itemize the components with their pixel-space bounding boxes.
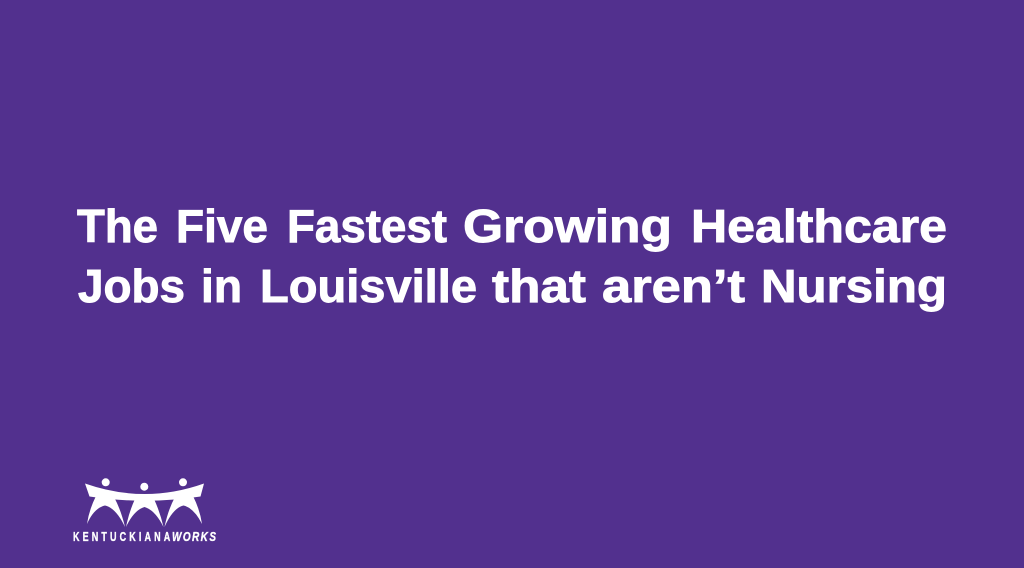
icon: three figures joined by a band <box>85 478 204 527</box>
title: Louisville <box>260 260 477 312</box>
title: Five <box>176 200 268 252</box>
logo wordmark: KENTUCKIANA <box>73 531 170 544</box>
title: Jobs <box>78 260 185 312</box>
title: Growing <box>463 200 672 252</box>
title: aren’t <box>602 260 745 312</box>
title <box>77 200 947 312</box>
title: Healthcare <box>691 200 947 252</box>
logo: KentuckianaWorks <box>73 478 216 544</box>
title: Fastest <box>287 200 447 252</box>
title: in <box>201 260 242 312</box>
title: Nursing <box>761 260 947 312</box>
title: that <box>492 260 586 312</box>
logo wordmark: WORKS <box>172 531 216 544</box>
logo wordmark <box>73 531 216 544</box>
title: The <box>77 200 158 252</box>
